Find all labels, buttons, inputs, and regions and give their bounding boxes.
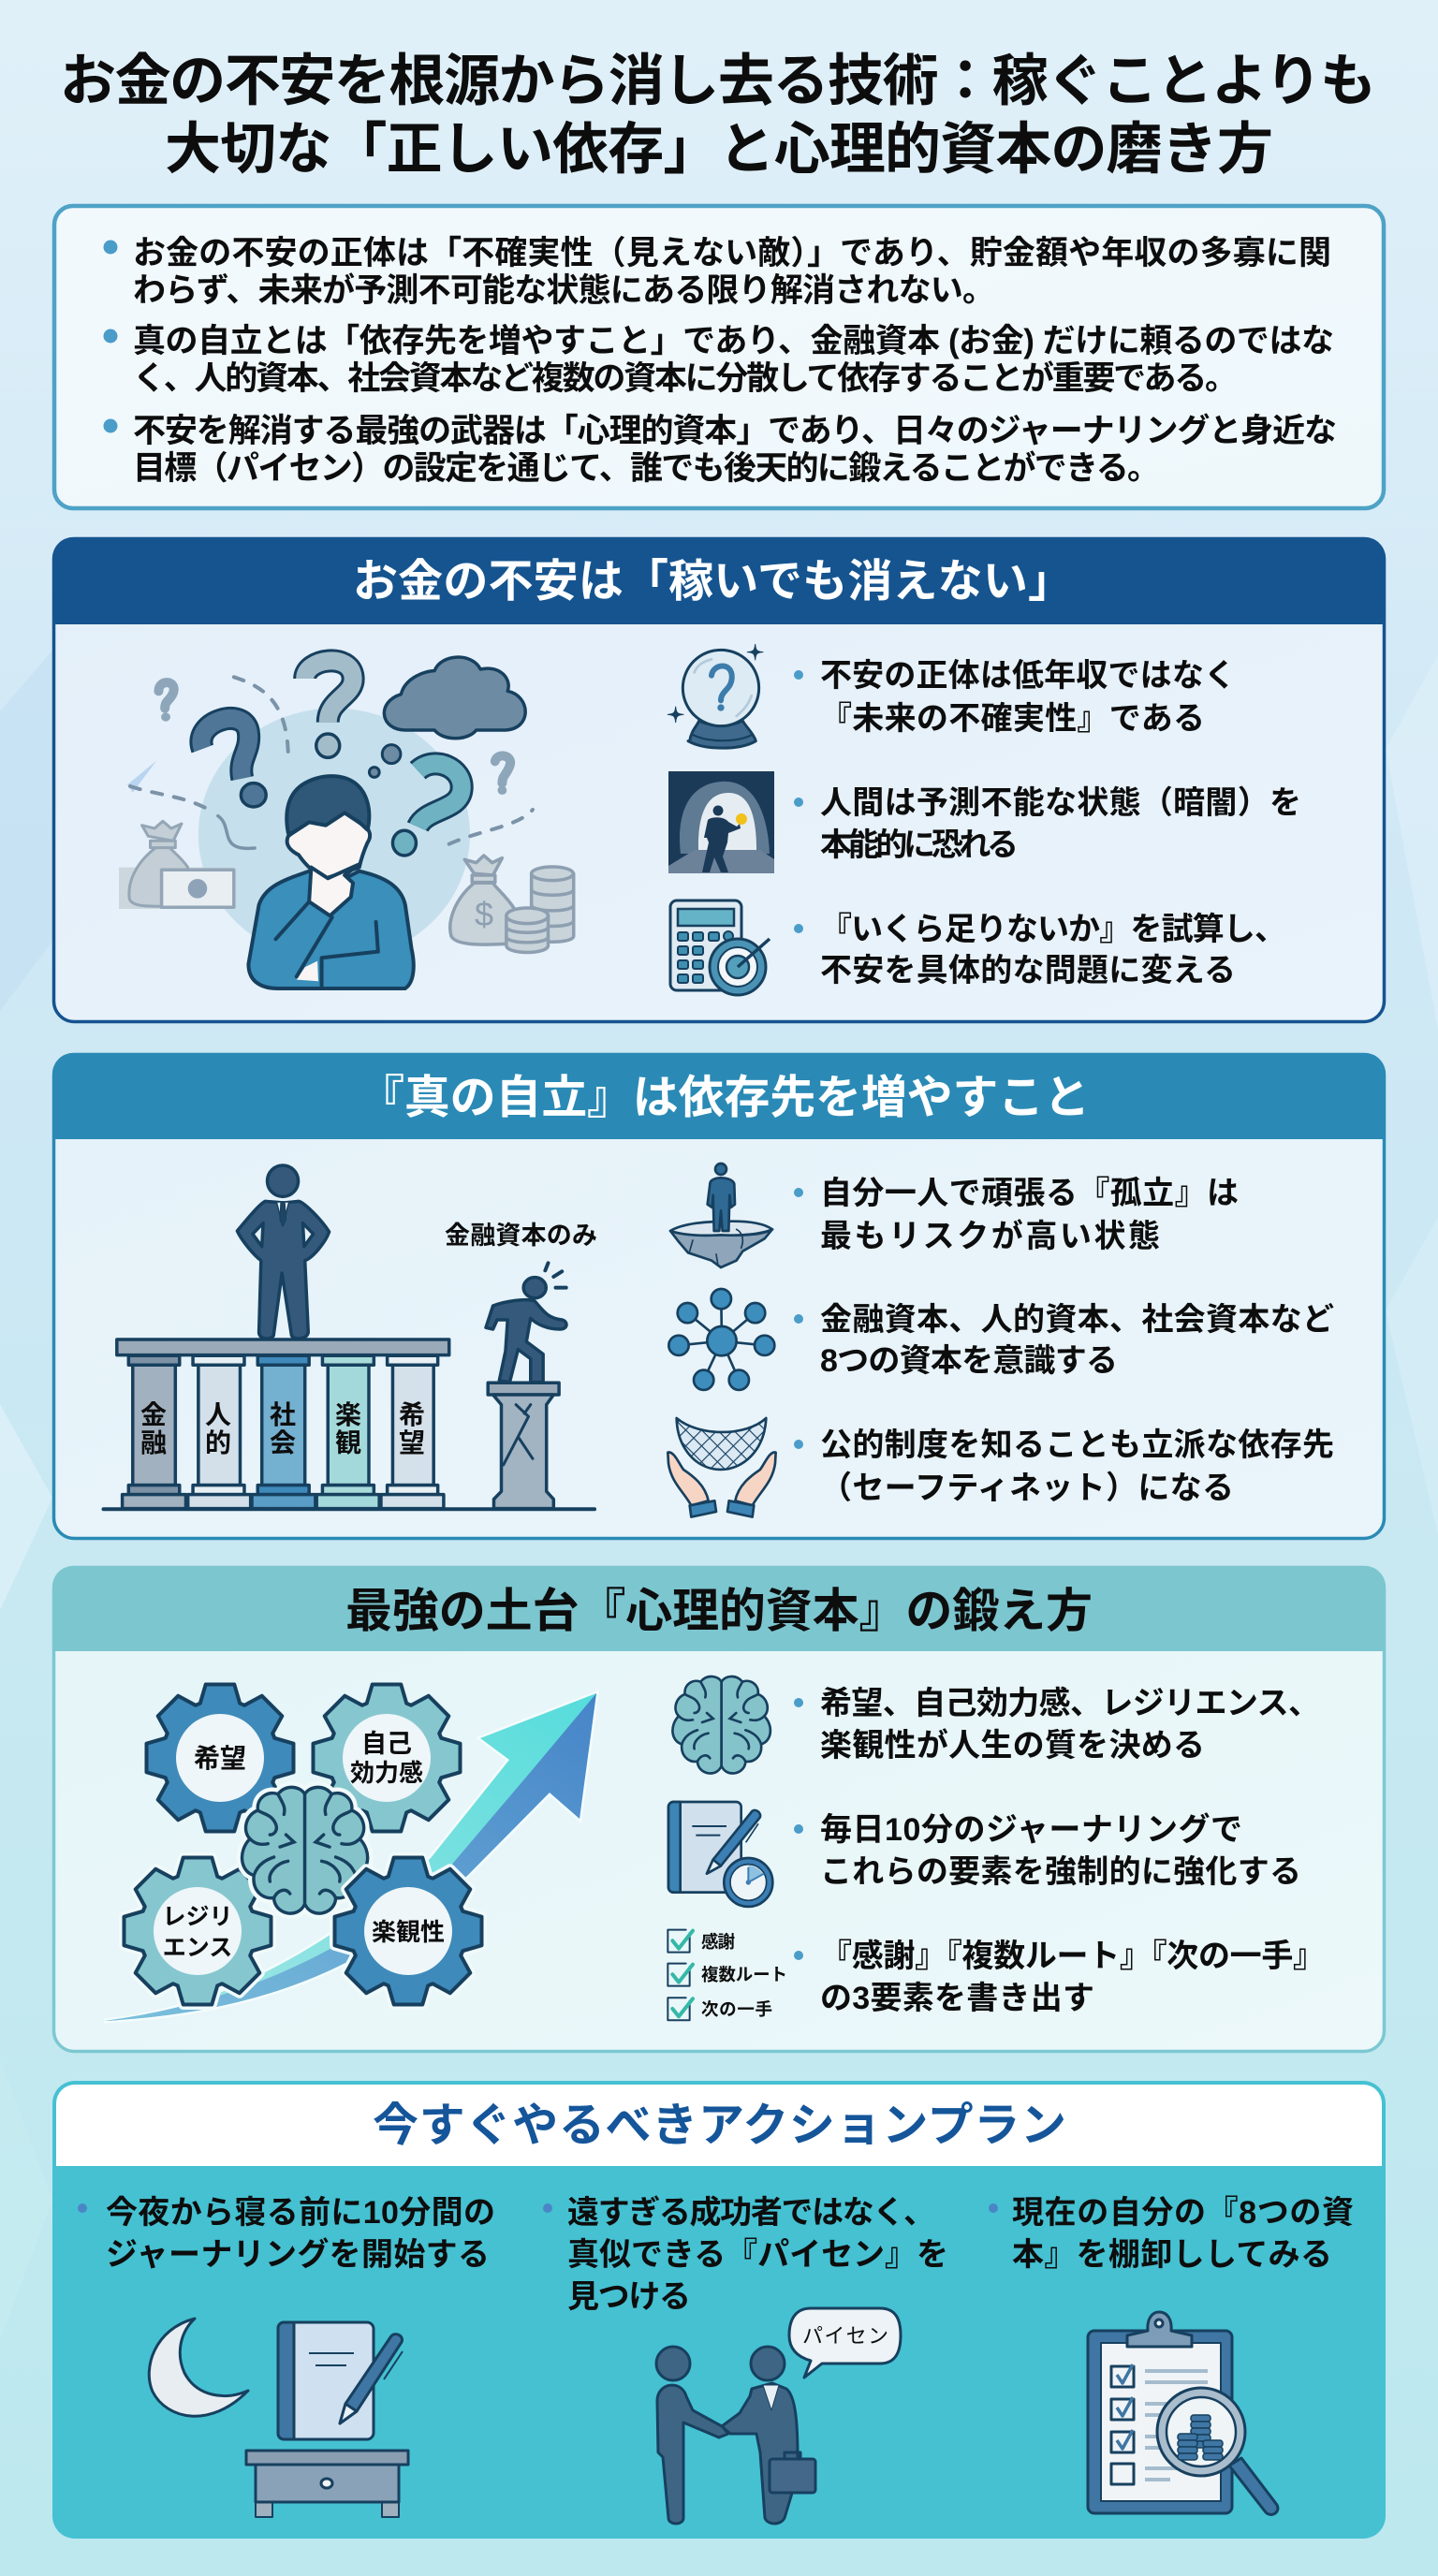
action 2: 見つける bbox=[567, 2279, 691, 2315]
icon: calculator and target bbox=[670, 900, 770, 995]
section 3 point 2 bbox=[794, 1812, 1301, 1890]
summary point 2: く、人的資本、社会資本など複数の資本に分散して依存することが重要である。 bbox=[133, 360, 1238, 397]
summary point 1: わらず、未来が予測不可能な状態にある限り解消されない。 bbox=[133, 272, 995, 309]
section 2 point 1: 最もリスクが高い状態 bbox=[820, 1218, 1160, 1254]
gear: hope: 希望 bbox=[194, 1744, 246, 1773]
icon: person on isolated rock bbox=[670, 1164, 772, 1267]
section 1 point 3 bbox=[794, 912, 1286, 988]
section 1 point 2 bbox=[794, 785, 1301, 863]
section 2 point 1 bbox=[794, 1176, 1239, 1254]
section 1 point 2: 人間は予測不能な状態（暗闇）を bbox=[820, 785, 1301, 821]
gear: hope bbox=[146, 1685, 294, 1831]
summary point 2: 真の自立とは「依存先を増やすこと」であり、金融資本 (お金) だけに頼るのではな bbox=[133, 323, 1334, 359]
section 1 header bbox=[52, 537, 1386, 624]
checklist: 次の一手 bbox=[701, 1999, 772, 2019]
illustration: four gears, brain and rising arrow bbox=[104, 1685, 596, 2021]
action 2: 遠すぎる成功者ではなく、 bbox=[567, 2195, 935, 2231]
section 2 point 2: 8つの資本を意識する bbox=[820, 1343, 1118, 1379]
action 1: ジャーナリングを開始する bbox=[106, 2237, 490, 2273]
gear: resilience: エンス bbox=[163, 1935, 232, 1961]
rising arrow bbox=[104, 1693, 596, 2021]
section 4 header: 今すぐやるべきアクションプラン bbox=[373, 2100, 1066, 2151]
icon: moon, notebook and desk bbox=[149, 2319, 408, 2517]
action 1: 今夜から寝る前に10分間の bbox=[106, 2195, 495, 2231]
brain bbox=[242, 1787, 368, 1913]
pillar labels bbox=[140, 1400, 425, 1457]
pillar labels: 望 bbox=[399, 1428, 425, 1457]
label: financial capital only: 金融資本のみ bbox=[445, 1222, 597, 1250]
summary point 3: 不安を解消する最強の武器は「心理的資本」であり、日々のジャーナリングと身近な bbox=[133, 413, 1337, 449]
summary point 2 bbox=[103, 323, 1334, 397]
icon: handshake with senior bbox=[656, 2308, 901, 2524]
section 1 point 1: 不安の正体は低年収ではなく bbox=[820, 658, 1236, 694]
gear: resilience: レジリ bbox=[162, 1904, 233, 1930]
gear: resilience bbox=[124, 1857, 271, 2005]
panel: summary bbox=[54, 206, 1384, 508]
pillar labels: 融 bbox=[140, 1428, 167, 1457]
section 1 header: お金の不安は「稼いでも消えない」 bbox=[353, 557, 1073, 607]
pillar labels: 希 bbox=[399, 1400, 425, 1429]
pillar labels: 観 bbox=[335, 1428, 361, 1457]
action 3 bbox=[989, 2195, 1354, 2273]
section 2 point 3: （セーフティネット）になる bbox=[820, 1471, 1234, 1506]
icon: clipboard with magnifier bbox=[1088, 2312, 1278, 2514]
summary point 3 bbox=[103, 413, 1337, 487]
section 2 point 3 bbox=[794, 1427, 1334, 1506]
summary point 3: 目標（パイセン）の設定を通じて、誰でも後天的に鍛えることができる。 bbox=[133, 450, 1160, 487]
icon label: dollar sign: $ bbox=[475, 895, 493, 933]
icon: network of capital bbox=[668, 1289, 774, 1390]
action 1 bbox=[78, 2195, 495, 2273]
gear: self-efficacy bbox=[313, 1685, 461, 1831]
gear: optimism bbox=[335, 1857, 481, 2005]
title: お金の不安を根源から消し去る技術：稼ぐことよりも bbox=[60, 50, 1376, 112]
section 3 point 3: の3要素を書き出す bbox=[820, 1981, 1094, 2016]
section 3 point 1: 楽観性が人生の質を決める bbox=[820, 1727, 1205, 1764]
section 3 header bbox=[52, 1566, 1386, 1651]
summary point 1 bbox=[103, 235, 1331, 309]
illustration: person on five pillars bbox=[104, 1165, 597, 1509]
action 3: 本』を棚卸ししてみる bbox=[1012, 2237, 1332, 2273]
pillar labels: 社 bbox=[270, 1400, 296, 1429]
section 2 header: 『真の自立』は依存先を増やすこと bbox=[359, 1073, 1090, 1123]
section 3 point 2: 毎日10分のジャーナリングで bbox=[820, 1812, 1242, 1848]
pillar labels: 人 bbox=[205, 1400, 231, 1429]
gear: self-efficacy: 自己 bbox=[361, 1730, 412, 1758]
title bbox=[60, 50, 1376, 181]
section 2 header bbox=[52, 1053, 1386, 1139]
title: 大切な「正しい依存」と心理的資本の磨き方 bbox=[165, 118, 1273, 181]
section 2 point 2 bbox=[794, 1302, 1334, 1379]
checklist bbox=[668, 1930, 787, 2020]
section 2 point 1: 自分一人で頑張る『孤立』は bbox=[820, 1176, 1239, 1211]
section 2 point 2: 金融資本、人的資本、社会資本など bbox=[820, 1302, 1334, 1338]
summary point 1: お金の不安の正体は「不確実性（見えない敵）」であり、貯金額や年収の多寡に関 bbox=[133, 235, 1331, 271]
section 3 point 3 bbox=[794, 1939, 1325, 2016]
icon: dark tunnel bbox=[668, 771, 774, 873]
pillar labels: 的 bbox=[205, 1428, 231, 1457]
panel: section 3 psychological capital bbox=[52, 1566, 1386, 2052]
section 3 header: 最強の土台『心理的資本』の鍛え方 bbox=[345, 1585, 1093, 1637]
section 3 point 1: 希望、自己効力感、レジリエンス、 bbox=[820, 1686, 1320, 1721]
action 2: 真似できる『パイセン』を bbox=[567, 2237, 948, 2273]
checklist: 複数ルート bbox=[701, 1965, 787, 1984]
section 2 point 3: 公的制度を知ることも立派な依存先 bbox=[820, 1427, 1334, 1463]
section 1 point 1: 『未来の不確実性』である bbox=[820, 701, 1205, 737]
panel: section 2 true independence bbox=[52, 1053, 1386, 1539]
gear: optimism: 楽観性 bbox=[372, 1918, 445, 1946]
section 3 point 3: 『感謝』『複数ルート』『次の一手』 bbox=[820, 1939, 1325, 1974]
icon: safety net and hands bbox=[668, 1418, 776, 1517]
section 1 point 2: 本能的に恐れる bbox=[820, 827, 1019, 863]
illustration: worried person with question marks bbox=[119, 657, 574, 988]
gear: self-efficacy: 効力感 bbox=[350, 1759, 423, 1787]
icon: brain bbox=[672, 1676, 770, 1773]
section 1 point 3: 『いくら足りないか』を試算し、 bbox=[820, 912, 1286, 947]
section 1 point 3: 不安を具体的な問題に変える bbox=[820, 953, 1236, 988]
panel: section 1 anxiety bbox=[52, 537, 1386, 1022]
panel: section 4 action plan bbox=[52, 2081, 1386, 2539]
action 2 bbox=[543, 2195, 948, 2315]
checklist: 感謝 bbox=[701, 1932, 735, 1952]
pillar labels: 会 bbox=[270, 1428, 296, 1457]
section 4 header bbox=[56, 2085, 1382, 2166]
section 3 point 1 bbox=[794, 1686, 1320, 1764]
pillar labels: 金 bbox=[140, 1400, 167, 1429]
icon: crystal ball bbox=[668, 644, 763, 748]
pillar labels: 楽 bbox=[335, 1400, 361, 1429]
section 3 point 2: これらの要素を強制的に強化する bbox=[820, 1854, 1301, 1890]
action 3: 現在の自分の『8つの資 bbox=[1012, 2195, 1354, 2231]
icon: handshake with senior: パイセン bbox=[802, 2324, 888, 2348]
icon: notebook, pen and clock bbox=[668, 1802, 772, 1907]
section 1 point 1 bbox=[794, 658, 1236, 737]
